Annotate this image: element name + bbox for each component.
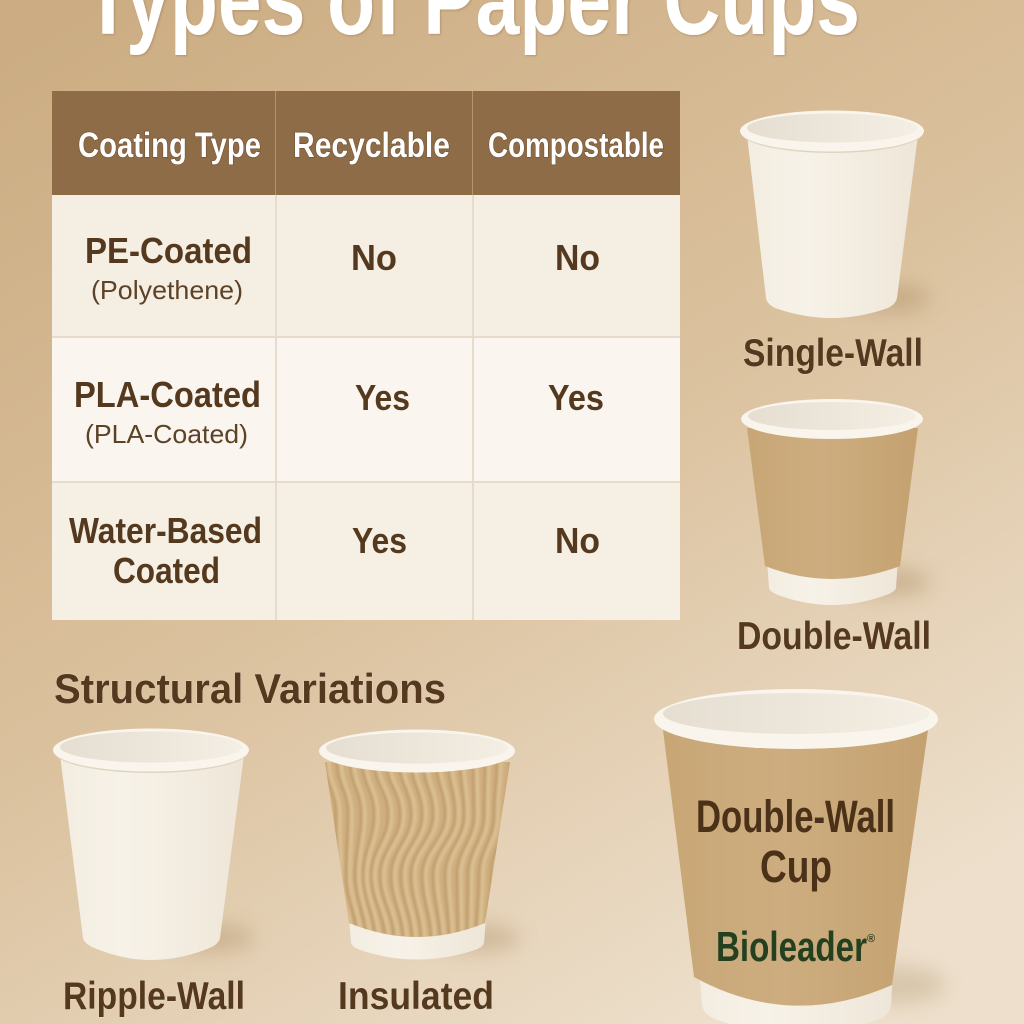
heading: Structural Variations: Structural Variations: [54, 665, 446, 712]
table row: Water-Based Coated: Coated: [113, 550, 220, 591]
panel: coating comparison table: [52, 91, 680, 620]
table header row: Recyclable: [293, 126, 450, 165]
label: Insulated: Insulated: [338, 975, 494, 1018]
table row: PLA-Coated: [52, 337, 680, 482]
table row: Water-Based Coated: [52, 482, 680, 620]
table header row: Coating Type: [78, 126, 261, 165]
cup logo: Bioleader: Bioleader: [716, 923, 867, 970]
table header row: [52, 91, 680, 195]
label: Single-Wall: Single-Wall: [743, 332, 923, 375]
table row: Water-Based Coated: Yes: [352, 520, 407, 561]
icon: double-wall cup: [741, 399, 930, 605]
table row: PE-Coated: PE-Coated: [85, 230, 252, 271]
icon: large double-wall cup: [654, 689, 945, 1024]
table row: Water-Based Coated: No: [555, 520, 600, 561]
icon: ripple-wall cup: [53, 728, 254, 960]
table row: PLA-Coated: PLA-Coated: [74, 374, 261, 415]
table row: PE-Coated: [52, 195, 680, 337]
table row: PLA-Coated: (PLA-Coated): [85, 419, 248, 449]
table row: PLA-Coated: Yes: [548, 377, 604, 418]
table row: Water-Based Coated: Water-Based: [69, 510, 262, 551]
table header row: Compostable: [488, 126, 664, 165]
table row: PE-Coated: No: [555, 237, 600, 278]
table row: PLA-Coated: Yes: [355, 377, 410, 418]
cup text: Double-Wall Cup: [696, 791, 895, 892]
icon: single-wall cup: [740, 110, 930, 318]
cup logo: Bioleader: ®: [867, 933, 875, 945]
label: Double-Wall: Double-Wall: [737, 615, 931, 658]
icon: insulated cup: [319, 730, 520, 960]
table row: PE-Coated: No: [351, 237, 397, 278]
table row: PE-Coated: (Polyethene): [91, 275, 243, 305]
cup text: Double-Wall Cup: Cup: [760, 841, 832, 892]
cup text: Double-Wall Cup: Double-Wall: [696, 791, 895, 842]
label: Ripple-Wall: Ripple-Wall: [63, 975, 245, 1018]
